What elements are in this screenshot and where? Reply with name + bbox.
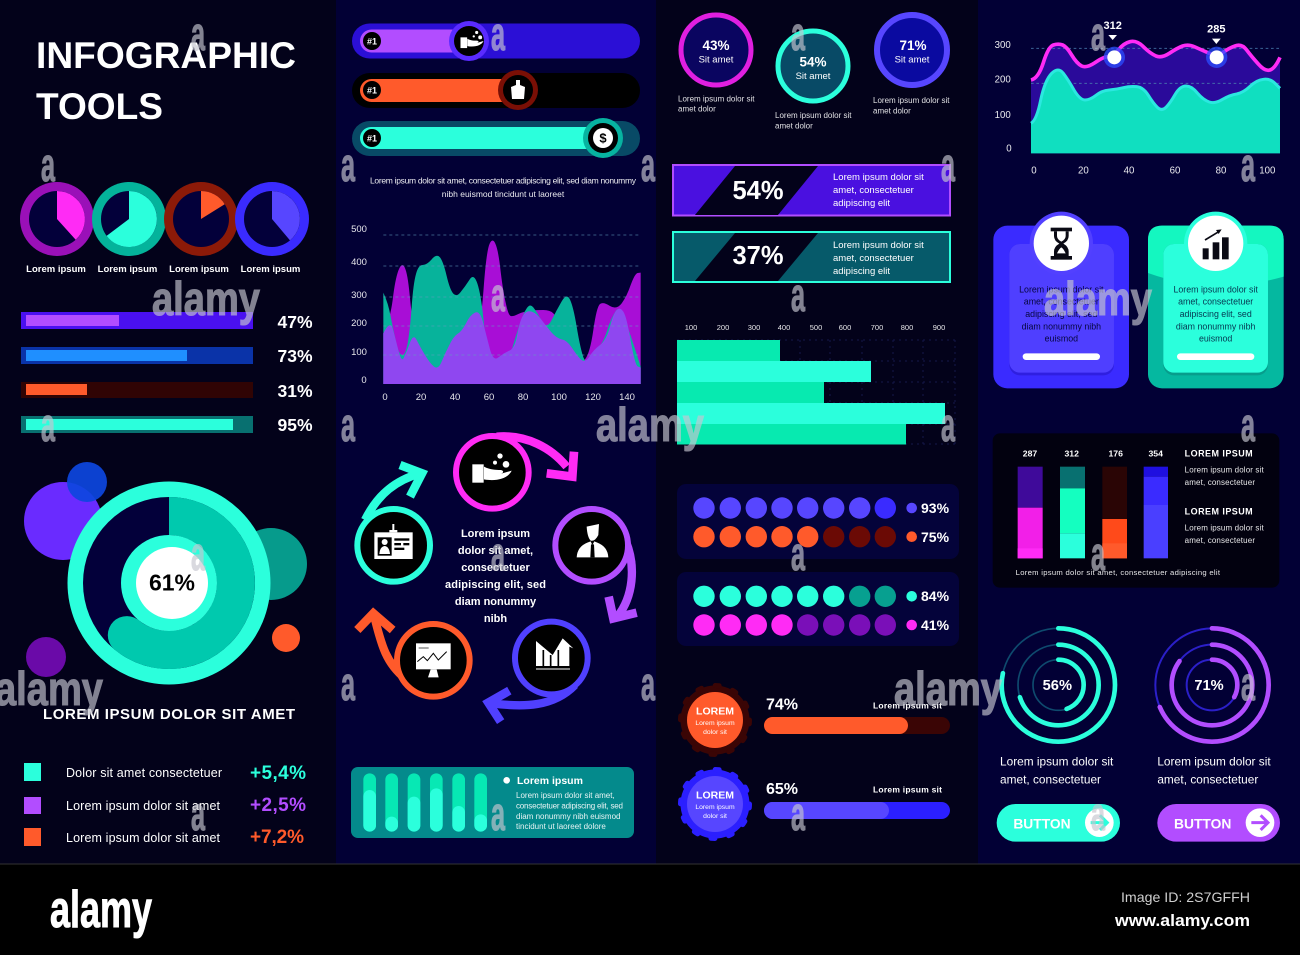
step: magenta hand xyxy=(456,436,574,509)
mini bars text: Lorem ipsum xyxy=(517,775,583,787)
ring text right xyxy=(1157,754,1271,787)
x axis labels: 20 xyxy=(416,392,426,403)
axis labels: 400 xyxy=(778,323,790,332)
icon: growth chart xyxy=(1203,229,1229,259)
banner 54%: amet, consectetuer xyxy=(833,185,914,196)
x labels xyxy=(1031,165,1275,176)
ring 54%: 54% xyxy=(799,54,827,70)
orange badge: Lorem ipsum xyxy=(695,720,735,727)
stacked bar notes: amet, consectetuer xyxy=(1185,478,1255,487)
card text teal xyxy=(1173,284,1258,344)
card teal xyxy=(1148,212,1284,388)
rings teal xyxy=(1002,628,1115,742)
slider orange xyxy=(352,70,640,110)
marker 285: 285 xyxy=(1207,23,1225,35)
banner 37%: amet, consectetuer xyxy=(833,253,914,264)
stock photo watermarks: a xyxy=(791,268,805,321)
x axis labels: 100 xyxy=(551,392,567,403)
dots row 93% xyxy=(693,497,950,519)
bar 73%: 73% xyxy=(277,346,313,366)
legend row teal xyxy=(24,763,306,784)
stacked bar 287 xyxy=(1018,449,1043,558)
card text blue xyxy=(1019,284,1104,344)
panel: stacked bars dark card xyxy=(993,433,1279,588)
legend row purple: +2,5% xyxy=(250,795,306,816)
teal area xyxy=(1031,70,1280,153)
ring 43%: amet dolor xyxy=(678,104,716,114)
legend row orange xyxy=(24,827,304,848)
bars xyxy=(677,340,945,444)
panel: concentric rings right xyxy=(1155,628,1280,842)
chart: layered area chart xyxy=(351,224,641,403)
panel: info cards xyxy=(993,212,1284,388)
pie orange xyxy=(164,182,238,256)
stock photo watermarks: a xyxy=(1241,657,1255,710)
orange badge: LOREM xyxy=(696,706,734,718)
site url: www.alamy.com xyxy=(1114,911,1250,930)
stock photo watermarks: a xyxy=(791,7,805,60)
slider teal: #1 xyxy=(367,134,377,144)
chart: horizontal bars xyxy=(677,323,955,444)
ring 71%: Lorem ipsum dolor sit xyxy=(873,96,950,105)
stacked bar 312: 312 xyxy=(1064,449,1079,459)
step: purple person xyxy=(555,509,637,618)
icon: hourglass xyxy=(1051,228,1072,260)
dots row 84% xyxy=(693,586,950,607)
banner 54%: adipiscing elit xyxy=(833,198,890,209)
diagram centre text: diam nonummy xyxy=(455,596,537,608)
ring 71%: Sit amet xyxy=(895,54,930,66)
ring text right: Lorem ipsum dolor sit xyxy=(1157,754,1271,768)
title line one: INFOGRAPHIC xyxy=(36,35,296,76)
panel: concentric rings right: 71% xyxy=(1194,678,1224,694)
stacked bar notes xyxy=(1185,448,1264,545)
card text blue: Lorem ipsum dolor sit xyxy=(1019,284,1104,294)
stock photo watermarks: a xyxy=(641,657,655,710)
stock photo watermarks: a xyxy=(791,527,805,580)
x labels: 60 xyxy=(1170,165,1180,176)
slider caption xyxy=(370,176,637,199)
panel: title xyxy=(36,35,296,127)
footer logo: alamy xyxy=(50,881,152,939)
mini bars text xyxy=(516,775,623,831)
stacked bar 176 xyxy=(1102,449,1127,558)
ring 54%: Lorem ipsum dolor sit xyxy=(775,111,852,120)
stock photo watermarks: a xyxy=(641,138,655,191)
diagram centre text: nibh xyxy=(484,613,507,625)
faint grid xyxy=(677,340,955,444)
card text blue: adipiscing elit, sed xyxy=(1025,309,1097,319)
panel: teal mini bars xyxy=(351,767,634,838)
banner 54% xyxy=(673,165,950,216)
banner 37% xyxy=(673,232,950,282)
diagram centre text: consectetuer xyxy=(461,562,530,574)
y labels: 0 xyxy=(1006,144,1012,155)
dots row 93%: 93% xyxy=(921,500,950,516)
pie teal xyxy=(92,182,166,256)
slider purple: #1 xyxy=(367,36,377,46)
stock photo watermarks: a xyxy=(191,787,205,840)
magenta line xyxy=(1031,41,1280,80)
stock photo watermarks: a xyxy=(791,787,805,840)
stock photo watermarks: a xyxy=(941,138,955,191)
y labels: 100 xyxy=(995,110,1011,121)
stock photo watermarks: a xyxy=(41,398,55,451)
y axis labels: 300 xyxy=(351,290,367,301)
axis labels: 700 xyxy=(871,323,883,332)
pie labels: Lorem ipsum xyxy=(169,264,229,275)
diagram centre text: dolor sit amet, xyxy=(458,545,533,557)
y axis labels xyxy=(351,224,367,386)
mini bars text: consectetuer adipiscing elit, sed xyxy=(516,802,623,810)
panel: badge progress orange xyxy=(680,686,950,754)
pill bars xyxy=(363,773,510,832)
x labels: 20 xyxy=(1078,165,1089,176)
rings purple xyxy=(1155,628,1269,742)
bar 95%: 95% xyxy=(277,415,313,435)
dots row 75% xyxy=(693,526,950,547)
card text teal: amet, consectetuer xyxy=(1178,297,1253,307)
plot areas xyxy=(383,235,641,384)
blue progress bar xyxy=(764,802,950,819)
image id: Image ID: 2S7GFFH xyxy=(1121,889,1250,905)
banner 37%: 37% xyxy=(732,242,784,270)
x axis labels: 140 xyxy=(619,392,635,403)
slider teal xyxy=(352,118,640,158)
dots row 41%: 41% xyxy=(921,617,950,633)
decorative bubbles xyxy=(24,462,307,677)
panel: badge progress blue: Lorem ipsum sit xyxy=(873,784,942,794)
mini bars text: diam nonummy nibh euismod xyxy=(516,812,620,821)
step: teal id card xyxy=(357,465,430,582)
axis labels: 200 xyxy=(717,323,729,332)
orange progress bar xyxy=(764,717,950,734)
y axis labels: 100 xyxy=(351,347,367,358)
card text blue: diam nonummy nibh xyxy=(1022,321,1101,331)
y axis labels: 500 xyxy=(351,224,367,235)
stock photo watermarks: alamy xyxy=(596,398,704,451)
y axis labels: 200 xyxy=(351,318,367,329)
donut caption: LOREM IPSUM DOLOR SIT AMET xyxy=(43,706,295,723)
stock photo watermarks: a xyxy=(341,657,355,710)
stacked bar 312 xyxy=(1060,449,1085,558)
ring 54% xyxy=(775,31,852,130)
stacked bar notes: Lorem ipsum dolor sit xyxy=(1185,524,1264,533)
slider purple xyxy=(352,21,640,61)
purple area under magenta line xyxy=(1031,41,1280,153)
axis labels: 600 xyxy=(839,323,851,332)
stock photo watermarks: a xyxy=(1091,7,1105,60)
banner 37%: Lorem ipsum dolor sit xyxy=(833,240,924,251)
stock photo watermarks: a xyxy=(41,138,55,191)
mini bars text: tincidunt ut laoreet dolore xyxy=(516,822,606,831)
stacked bar notes: LOREM IPSUM xyxy=(1185,448,1253,458)
legend row teal: Dolor sit amet consectetuer xyxy=(66,766,222,780)
axis labels xyxy=(685,323,945,332)
marker 312: 312 xyxy=(1104,20,1122,32)
x axis labels: 120 xyxy=(585,392,601,403)
ring 54%: amet dolor xyxy=(775,122,813,130)
diagram: five step cycle xyxy=(357,436,637,722)
ring 43% xyxy=(678,15,755,114)
stock photo watermarks: alamy xyxy=(152,272,260,325)
panel: legend with deltas xyxy=(24,763,306,848)
pie labels xyxy=(26,264,300,275)
ring 43%: 43% xyxy=(702,38,730,53)
stacked bar 287: 287 xyxy=(1023,449,1037,459)
stock photo watermarks: a xyxy=(941,398,955,451)
blue badge xyxy=(680,770,750,838)
step: blue chart xyxy=(488,622,588,722)
title line two: TOOLS xyxy=(36,86,163,127)
banner 54%: Lorem ipsum dolor sit xyxy=(833,172,924,183)
ring 43%: Lorem ipsum dolor sit xyxy=(678,94,755,104)
panel: dot matrix one xyxy=(677,484,959,559)
stock photo watermarks: a xyxy=(1241,138,1255,191)
stacked bar notes: Lorem ipsum dolor sit xyxy=(1185,466,1264,475)
x axis labels: 0 xyxy=(382,392,388,403)
marker 285 xyxy=(1206,23,1227,68)
x axis labels xyxy=(382,392,635,403)
stock photo watermarks: a xyxy=(1091,787,1105,840)
button purple xyxy=(1157,804,1280,842)
card text blue: euismod xyxy=(1045,334,1078,344)
stock photo watermarks: a xyxy=(1091,527,1105,580)
panel: bubble donut chart xyxy=(24,462,307,723)
y labels xyxy=(995,40,1012,155)
blue badge: dolor sit xyxy=(703,813,727,820)
x labels: 100 xyxy=(1259,165,1275,176)
panel: badge progress blue: 65% xyxy=(766,781,798,798)
stacked bar footnote: Lorem ipsum dolor sit amet, consectetuer adipiscing elit xyxy=(1016,568,1221,577)
pie labels: Lorem ipsum xyxy=(241,264,300,275)
mini bars text: Lorem ipsum dolor sit amet, xyxy=(516,791,615,800)
axis labels: 500 xyxy=(810,323,822,332)
y axis labels: 0 xyxy=(361,375,367,386)
legend row purple: Lorem ipsum dolor sit amet xyxy=(66,799,221,813)
ring text right: amet, consectetuer xyxy=(1157,773,1258,787)
dots row 75%: 75% xyxy=(921,529,950,545)
y labels: 300 xyxy=(995,40,1011,51)
stacked bar notes: LOREM IPSUM xyxy=(1185,506,1253,516)
slider teal: $ xyxy=(599,130,607,146)
diagram centre text xyxy=(445,528,546,625)
panel: badge progress blue xyxy=(680,770,950,838)
y labels: 200 xyxy=(995,74,1011,85)
button teal: BUTTON xyxy=(1013,816,1071,831)
panel: concentric rings left xyxy=(997,628,1120,842)
card text teal: adipiscing elit, sed xyxy=(1180,309,1252,319)
ring text left: amet, consectetuer xyxy=(1000,773,1101,787)
panel: percentage bars xyxy=(21,312,313,435)
stacked bar 354: 354 xyxy=(1148,449,1163,459)
card blue xyxy=(993,212,1129,388)
blue badge: Lorem ipsum xyxy=(695,804,735,811)
panel: dot matrix two xyxy=(677,572,959,646)
ring text left: Lorem ipsum dolor sit xyxy=(1000,754,1114,768)
axis labels: 100 xyxy=(685,323,697,332)
bar 73% xyxy=(21,346,313,366)
bar 31% xyxy=(21,381,313,401)
ring 54%: Sit amet xyxy=(796,71,831,82)
axis labels: 300 xyxy=(748,323,760,332)
x labels: 0 xyxy=(1031,165,1037,176)
bar 31%: 31% xyxy=(277,381,313,401)
stock photo watermarks: alamy xyxy=(1044,272,1152,325)
ring text left xyxy=(1000,754,1114,787)
card text teal: Lorem ipsum dolor sit xyxy=(1173,284,1258,294)
stacked bar 176: 176 xyxy=(1108,449,1123,459)
bar 47% xyxy=(21,312,313,332)
panel: concentric rings left: 56% xyxy=(1043,678,1072,694)
banner 37%: adipiscing elit xyxy=(833,266,890,277)
ring 71%: 71% xyxy=(899,38,927,53)
axis labels: 900 xyxy=(933,323,945,332)
axis labels: 800 xyxy=(901,323,913,332)
stock photo watermarks: alamy xyxy=(894,662,1002,715)
ring 71% xyxy=(873,15,950,116)
blue badge: LOREM xyxy=(696,790,734,802)
diagram centre text: adipiscing elit, sed xyxy=(445,579,546,591)
button teal xyxy=(997,804,1120,842)
bar 95% xyxy=(21,415,313,435)
stock photo watermarks: a xyxy=(1241,398,1255,451)
legend row teal: +5,4% xyxy=(250,763,306,784)
chart: line area chart with markers xyxy=(995,20,1280,176)
orange badge xyxy=(680,686,750,754)
ring 71%: amet dolor xyxy=(873,106,911,116)
pie labels: Lorem ipsum xyxy=(98,264,157,275)
card text teal: diam nonummy nibh xyxy=(1176,321,1255,331)
orange badge: dolor sit xyxy=(703,729,727,736)
x axis labels: 40 xyxy=(450,392,460,403)
dots row 84%: 84% xyxy=(921,588,950,604)
step: orange monitor xyxy=(357,613,470,697)
x axis labels: 80 xyxy=(518,392,528,403)
banner 54%: 54% xyxy=(732,177,784,205)
stock photo watermarks: a xyxy=(491,268,505,321)
grid lines xyxy=(1031,48,1280,83)
stock photo watermarks: a xyxy=(491,787,505,840)
stock photo watermarks: a xyxy=(341,398,355,451)
slider orange: #1 xyxy=(367,86,377,96)
stacked bar notes: amet, consectetuer xyxy=(1185,536,1255,545)
panel: three ring stats xyxy=(678,15,950,130)
stock photo watermarks: a xyxy=(341,138,355,191)
slider caption: nibh euismod tincidunt ut laoreet xyxy=(442,189,565,199)
bar 47%: 47% xyxy=(277,312,313,332)
marker 312 xyxy=(1104,20,1125,68)
ring 43%: Sit amet xyxy=(699,54,734,66)
legend row purple xyxy=(24,795,306,816)
panel: badge progress orange: 74% xyxy=(766,696,798,714)
x labels: 80 xyxy=(1216,165,1226,176)
legend row orange: Lorem ipsum dolor sit amet xyxy=(66,831,221,845)
stock photo watermarks: a xyxy=(191,527,205,580)
stacked bar 354 xyxy=(1144,449,1168,558)
footer bar xyxy=(0,864,1300,939)
stock photo watermarks: a xyxy=(491,7,505,60)
donut: 61% xyxy=(149,570,195,596)
button purple: BUTTON xyxy=(1174,816,1231,831)
diagram centre text: Lorem ipsum xyxy=(461,528,530,540)
panel: stat banners xyxy=(673,165,950,282)
pie magenta xyxy=(20,182,94,256)
panel: badge progress orange: Lorem ipsum sit xyxy=(873,700,942,710)
dots row 41% xyxy=(693,614,950,636)
slider caption: Lorem ipsum dolor sit amet, consectetuer adipiscing elit, sed diam nonummy xyxy=(370,176,637,186)
card text blue: amet, consectetuer xyxy=(1024,297,1099,307)
pie labels: Lorem ipsum xyxy=(26,264,86,275)
stock photo watermarks: a xyxy=(491,527,505,580)
donut xyxy=(68,482,270,684)
panel: four pie charts xyxy=(20,182,309,275)
teal line xyxy=(1031,70,1280,123)
card text teal: euismod xyxy=(1199,334,1232,344)
stock photo watermarks: a xyxy=(191,7,205,60)
x axis labels: 60 xyxy=(484,392,494,403)
legend row orange: +7,2% xyxy=(250,827,304,848)
pie blue xyxy=(235,182,309,256)
panel: pill sliders xyxy=(352,21,640,199)
y axis labels: 400 xyxy=(351,257,367,268)
x labels: 40 xyxy=(1124,165,1134,176)
